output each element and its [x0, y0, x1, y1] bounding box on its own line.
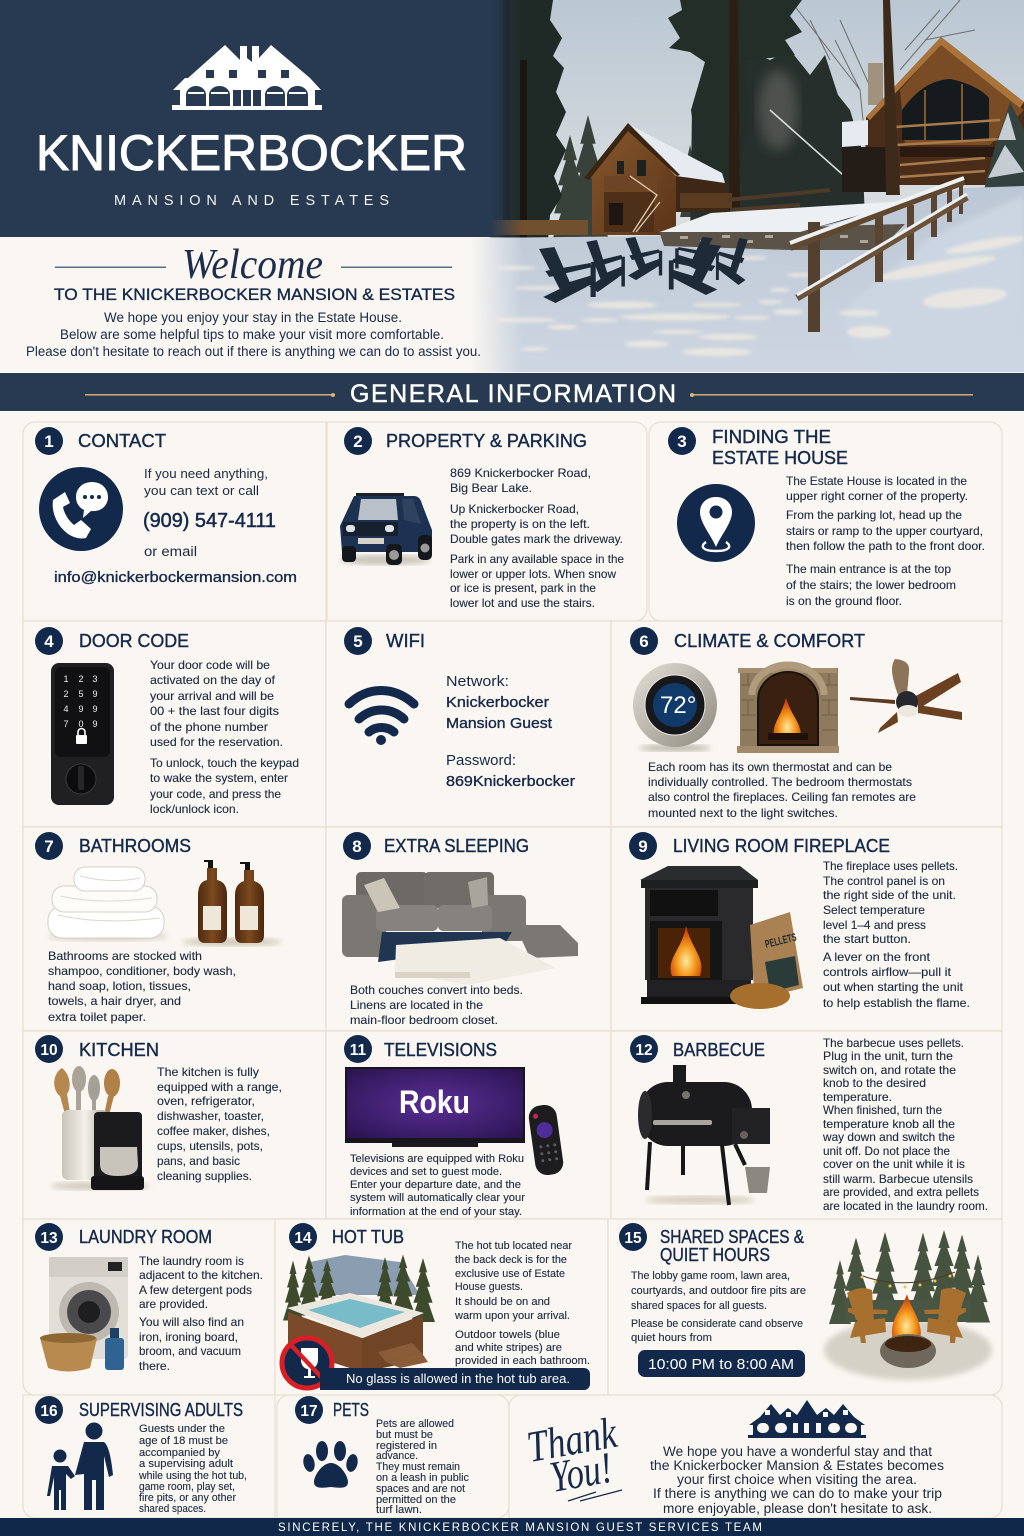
fireplace text: A lever on the front	[823, 950, 931, 964]
button: quiet hours	[638, 1350, 805, 1377]
heading: climate and comfort: CLIMATE & COMFORT	[674, 630, 865, 651]
thank you text: If there is anything we can do to make your trip	[653, 1486, 942, 1501]
number 4: 4	[44, 632, 54, 651]
supervising text: shared spaces.	[139, 1503, 206, 1515]
icon: thermostat: 72°	[660, 692, 696, 719]
panel: shared spaces and quiet hours	[608, 1219, 1002, 1395]
number 8	[343, 832, 371, 860]
door code text: 00 + the last four digits	[150, 704, 279, 718]
icon: television showing Roku: Roku	[399, 1084, 470, 1120]
barbecue text: temperature knob all the	[823, 1117, 955, 1131]
hot tub text: The hot tub located near	[455, 1240, 572, 1252]
number 7: 7	[44, 837, 54, 856]
wifi text	[446, 673, 575, 790]
heading: finding the estate house	[712, 426, 848, 468]
bathrooms text: Bathrooms are stocked with	[48, 949, 202, 963]
hot tub text: House guests.	[455, 1281, 523, 1293]
supervising text: Guests under the	[139, 1423, 225, 1435]
pets text: turf lawn.	[376, 1504, 422, 1516]
shared spaces text	[631, 1270, 806, 1344]
welcome panel background	[0, 237, 472, 373]
heading: property and parking: PROPERTY & PARKING	[386, 430, 587, 451]
number 9: 9	[638, 837, 648, 856]
icon: sofa bed	[342, 872, 578, 985]
hot tub text: provided in each bathroom.	[455, 1355, 590, 1367]
thank you script: Thank	[523, 1408, 622, 1472]
bathrooms text: towels, a hair dryer, and	[48, 994, 181, 1008]
property text: Park in any available space in the	[450, 552, 624, 566]
televisions text: Televisions are equipped with Roku	[350, 1153, 524, 1165]
barbecue text: When finished, turn the	[823, 1103, 942, 1117]
subtitle: MANSION AND ESTATES	[114, 193, 389, 209]
icon: smart lock: 3	[92, 674, 98, 684]
number 13: 13	[40, 1230, 58, 1247]
heading: shared spaces and quiet hours: SHARED SPACES &	[660, 1226, 805, 1247]
icon: television showing Roku	[345, 1067, 525, 1147]
header fade into photo	[490, 0, 522, 237]
footer band	[0, 1518, 1024, 1536]
kitchen text: cleaning supplies.	[157, 1169, 252, 1183]
kitchen text: dishwasher, toaster,	[157, 1109, 264, 1123]
Adirondack chairs	[539, 237, 748, 303]
number 1	[35, 427, 63, 455]
icon: location pin	[677, 484, 755, 562]
hot tub text	[454, 1240, 590, 1367]
number 14: 14	[294, 1230, 312, 1247]
televisions text: system will automatically clear your	[350, 1192, 525, 1204]
icon: remote control	[527, 1103, 565, 1177]
bathrooms text: hand soap, lotion, tissues,	[48, 979, 191, 993]
icon: smart lock: 9	[92, 689, 98, 699]
extra sleeping text: main-floor bedroom closet.	[350, 1013, 498, 1027]
icon: laundry basket and detergent	[40, 1328, 124, 1372]
tall pine, centre	[668, 0, 802, 213]
bathrooms text: extra toilet paper.	[48, 1010, 146, 1024]
icon: fire pit with chairs and pines	[824, 1230, 992, 1380]
banner: no glass	[320, 1368, 590, 1390]
heading: laundry room: LAUNDRY ROOM	[79, 1226, 212, 1247]
kitchen text: oven, refrigerator,	[157, 1094, 255, 1108]
icon: hot tub among pines	[283, 1254, 435, 1372]
heading: wifi: WIFI	[386, 630, 425, 651]
contact text: If you need anything,	[144, 466, 268, 481]
number 15	[619, 1223, 647, 1251]
heading: supervising adults: SUPERVISING ADULTS	[79, 1399, 243, 1420]
icon: wifi signal	[349, 690, 414, 744]
property text: lower lot and use the stairs.	[450, 596, 595, 610]
extra sleeping text	[350, 983, 523, 1027]
heading: pets: PETS	[333, 1399, 369, 1420]
panel: supervising adults	[23, 1395, 275, 1518]
barbecue text: Plug in the unit, turn the	[823, 1049, 953, 1063]
fireplace text: to help establish the flame.	[823, 996, 970, 1010]
icon: smart lock: 2	[63, 689, 69, 699]
icon: washing machine	[49, 1257, 128, 1359]
panel: living room fireplace	[611, 827, 1002, 1031]
section band: general information: GENERAL INFORMATION	[350, 380, 676, 408]
kitchen text: cups, utensils, pots,	[157, 1139, 263, 1153]
kitchen text: The kitchen is fully	[157, 1065, 259, 1079]
laundry text: broom, and vacuum	[139, 1344, 241, 1358]
climate text: mounted next to the light switches.	[648, 806, 838, 820]
panel: wifi	[326, 621, 611, 827]
fireplace text	[823, 859, 970, 1010]
climate text	[648, 760, 916, 820]
contact text: you can text or call	[144, 483, 259, 498]
hot tub text: and white stripes) are	[455, 1342, 562, 1354]
number 16: 16	[40, 1403, 58, 1420]
bathrooms text	[48, 949, 236, 1024]
number 10	[35, 1035, 63, 1063]
icon: amber bottles	[182, 860, 282, 946]
photo: snowy cabins and fire pit seating	[470, 0, 1024, 372]
icon: smart lock: 9	[78, 704, 84, 714]
heading: shared spaces and quiet hours: QUIET HOURS	[660, 1244, 770, 1265]
welcome rule left	[55, 266, 166, 268]
televisions text: Enter your departure date, and the	[350, 1179, 521, 1191]
number 15: 15	[624, 1230, 642, 1247]
welcome script: Welcome	[182, 242, 323, 288]
heading: hot tub: HOT TUB	[332, 1226, 404, 1247]
fireplace text: controls airflow—pull it	[823, 965, 952, 979]
kitchen text: pans, and basic	[157, 1154, 240, 1168]
door code text: your arrival and will be	[150, 689, 274, 703]
barbecue text	[822, 1036, 988, 1213]
fireplace text: the right side of the unit.	[823, 888, 956, 902]
pets text: but must be	[376, 1429, 433, 1441]
icon: smart lock: 2	[78, 674, 84, 684]
hot tub text: exclusive use of Estate	[455, 1268, 565, 1280]
property text: Double gates mark the driveway.	[450, 532, 623, 546]
background frosted trees	[690, 0, 975, 240]
climate text: also control the fireplaces. Ceiling fan remotes are	[648, 790, 916, 804]
button: quiet hours: 10:00 PM to 8:00 AM	[648, 1356, 794, 1373]
supervising text: fire pits, or any other	[139, 1492, 236, 1504]
icon: smart lock: 9	[92, 719, 98, 729]
property text	[450, 466, 624, 610]
barbecue text: cover on the unit while it is	[823, 1157, 965, 1171]
heading: barbecue: BARBECUE	[673, 1039, 765, 1060]
left log cabin	[484, 123, 830, 235]
panel: climate and comfort	[611, 621, 1002, 827]
pets text: registered in	[376, 1440, 437, 1452]
welcome rule right	[341, 266, 452, 268]
panel: hot tub	[275, 1219, 608, 1395]
property text: Big Bear Lake.	[450, 481, 532, 495]
door code text	[150, 658, 299, 816]
supervising text: while using the hot tub,	[138, 1470, 247, 1482]
heading: bathrooms: BATHROOMS	[79, 835, 191, 856]
extra sleeping text: Linens are located in the	[350, 998, 483, 1012]
pets text: spaces and are not	[376, 1483, 465, 1495]
footer band: SINCERELY, THE KNICKERBOCKER MANSION GUEST SERVICES TEAM	[278, 1522, 762, 1534]
barbecue text: still warm. Barbecue utensils	[823, 1172, 973, 1186]
contact text: info@knickerbockermansion.com	[54, 569, 297, 586]
number 13	[35, 1223, 63, 1251]
panel: kitchen	[23, 1031, 326, 1219]
finding text	[786, 474, 985, 608]
number 11: 11	[350, 1042, 367, 1059]
panel: extra sleeping	[326, 827, 611, 1031]
header navy panel	[0, 0, 490, 237]
televisions text	[350, 1153, 525, 1218]
icon: blue SUV	[340, 493, 432, 565]
climate text: individually controlled. The bedroom thermostats	[648, 775, 912, 789]
thank you text: the Knickerbocker Mansion & Estates becomes	[650, 1458, 944, 1473]
door code text: Your door code will be	[150, 658, 270, 672]
shared spaces text: Please be considerate cand observe	[631, 1318, 803, 1330]
panel: thank you	[509, 1395, 1002, 1518]
icon: smart lock: 9	[92, 704, 98, 714]
supervising text: game room, play set,	[139, 1481, 235, 1493]
title: KNICKERBOCKER	[36, 125, 467, 181]
panel: finding the estate house	[649, 422, 1002, 621]
shared spaces text: courtyards, and outdoor fire pits are	[631, 1285, 806, 1297]
icon: pellet bag and pile: PELLETS	[764, 932, 798, 951]
wifi text: Mansion Guest	[446, 715, 553, 732]
finding text: then follow the path to the front door.	[786, 539, 985, 553]
number 17	[295, 1396, 323, 1424]
number 3: 3	[677, 432, 687, 451]
pets text: They must remain	[376, 1461, 460, 1473]
panel: contact	[23, 422, 326, 621]
number 2	[344, 427, 372, 455]
laundry text: The laundry room is	[139, 1254, 244, 1268]
thank you script: You!	[546, 1443, 616, 1502]
number 12: 12	[635, 1042, 653, 1059]
heading: living room fireplace: LIVING ROOM FIREPLACE	[673, 835, 890, 856]
number 12	[630, 1035, 658, 1063]
barbecue text: switch on, and rotate the	[823, 1063, 956, 1077]
tall pine, left edge of photo	[485, 0, 566, 240]
welcome heading: TO THE KNICKERBOCKER MANSION & ESTATES	[54, 286, 455, 304]
wifi text: Password:	[446, 752, 516, 769]
shared spaces text: The lobby game room, lawn area,	[631, 1270, 790, 1282]
pets text: on a leash in public	[376, 1472, 469, 1484]
hot tub text: It should be on and	[455, 1296, 550, 1308]
wooden fence	[790, 178, 967, 332]
icon: smart lock: 4	[63, 704, 69, 714]
thank you text: your first choice when visiting the area.	[677, 1472, 917, 1487]
property text: Up Knickerbocker Road,	[450, 502, 579, 516]
door code text: your code, and press the	[150, 787, 281, 801]
property text: or ice is present, park in the	[450, 581, 596, 595]
panel: barbecue	[611, 1031, 1002, 1219]
heading: extra sleeping: EXTRA SLEEPING	[384, 835, 529, 856]
supervising text: accompanied by	[139, 1447, 221, 1459]
barbecue text: are located in the laundry room.	[823, 1199, 988, 1213]
number 1: 1	[44, 432, 54, 451]
barbecue text: way down and switch the	[822, 1130, 955, 1144]
pets text: Pets are allowed	[376, 1418, 454, 1430]
panel: pets	[277, 1395, 509, 1518]
number 4	[35, 627, 63, 655]
icon: pellet bag and pile	[730, 912, 803, 1009]
shared spaces text: quiet hours from	[631, 1332, 712, 1344]
number 3	[668, 427, 696, 455]
contact text: (909) 547-4111	[143, 510, 276, 532]
welcome text: Below are some helpful tips to make your visit more comfortable.	[60, 327, 444, 342]
number 14	[289, 1223, 317, 1251]
extra sleeping text: Both couches convert into beds.	[350, 983, 523, 997]
barbecue text: knob to the desired	[823, 1076, 926, 1090]
icon: stone fireplace	[737, 665, 839, 753]
icon: pellet stove	[640, 866, 758, 1004]
pets text: permitted on the	[376, 1494, 456, 1506]
icon: paw print	[302, 1441, 359, 1488]
thank you text: more enjoyable, please don't hesitate to ask.	[663, 1501, 932, 1516]
icon: smart lock: 5	[78, 689, 84, 699]
panel: televisions	[326, 1031, 611, 1219]
number 17: 17	[300, 1403, 318, 1420]
icon: thermostat	[633, 663, 717, 751]
property text: the property is on the left.	[450, 517, 590, 531]
kitchen text	[157, 1065, 282, 1183]
stone wall and snowy terrace	[659, 200, 922, 250]
fireplace text: The control panel is on	[823, 874, 945, 888]
barbecue text: temperature.	[823, 1090, 892, 1104]
laundry text: iron, ironing board,	[139, 1330, 238, 1344]
icon: pellet smoker	[638, 1065, 770, 1205]
shared spaces text: shared spaces for all guests.	[631, 1300, 767, 1312]
laundry text: are provided.	[139, 1297, 208, 1311]
panel: property and parking	[327, 422, 647, 621]
thank you text	[650, 1444, 944, 1516]
door code text: of the phone number	[150, 720, 268, 734]
number 8: 8	[352, 837, 362, 856]
hot tub text: Outdoor towels (blue	[455, 1329, 560, 1341]
hot tub text: warm upon your arrival.	[454, 1310, 570, 1322]
number 5: 5	[353, 632, 363, 651]
kitchen text: equipped with a range,	[157, 1080, 282, 1094]
heading: shared spaces and quiet hours	[660, 1226, 805, 1265]
logo: mansion small	[748, 1400, 866, 1438]
supervising text: age of 18 must be	[139, 1435, 228, 1447]
laundry text: A few detergent pods	[139, 1283, 252, 1297]
icon: stacked towels	[48, 867, 168, 941]
heading: door code: DOOR CODE	[79, 630, 189, 651]
finding text: of the stairs; the lower bedroom	[786, 578, 956, 592]
icon: no glass sign	[282, 1338, 332, 1388]
wifi text: Network:	[446, 673, 509, 690]
door code text: used for the reservation.	[150, 735, 283, 749]
heading: finding the estate house: ESTATE HOUSE	[712, 447, 848, 468]
icon: adult and child	[47, 1422, 113, 1510]
number 10: 10	[40, 1042, 58, 1059]
icon: smart lock: 7	[63, 719, 69, 729]
section band: general information	[0, 373, 1024, 411]
property text: 869 Knickerbocker Road,	[450, 466, 591, 480]
fireplace text: The fireplace uses pellets.	[823, 859, 958, 873]
property text: lower or upper lots. When snow	[450, 567, 616, 581]
finding text: stairs or ramp to the upper courtyard,	[786, 524, 983, 538]
finding text: is on the ground floor.	[786, 594, 902, 608]
barbecue text: The barbecue uses pellets.	[823, 1036, 964, 1050]
supervising text: a supervising adult	[139, 1458, 233, 1470]
panel: door code	[23, 621, 326, 827]
door code text: lock/unlock icon.	[150, 802, 239, 816]
right timber lodge	[842, 37, 1024, 192]
number 6: 6	[639, 632, 649, 651]
wifi text: Knickerbocker	[446, 694, 549, 711]
door code text: to wake the system, enter	[150, 771, 288, 785]
contact text: or email	[144, 544, 197, 559]
logo: mansion	[172, 45, 322, 110]
panel: laundry room	[23, 1219, 275, 1395]
icon: ceiling fan	[850, 659, 962, 733]
televisions text: devices and set to guest mode.	[350, 1166, 502, 1178]
finding text: upper right corner of the property.	[786, 489, 968, 503]
laundry text: You will also find an	[139, 1315, 244, 1329]
laundry text	[139, 1254, 263, 1373]
door code text: To unlock, touch the keypad	[150, 756, 299, 770]
snowy ground	[470, 186, 1024, 372]
heading: televisions: TELEVISIONS	[384, 1039, 497, 1060]
number 16	[35, 1396, 63, 1424]
heading: finding the estate house: FINDING THE	[712, 426, 831, 447]
climate text: Each room has its own thermostat and can be	[648, 760, 892, 774]
finding text: The Estate House is located in the	[786, 474, 967, 488]
pets text: advance.	[376, 1450, 418, 1462]
welcome fade into photo	[470, 237, 522, 373]
snow tree, far right	[984, 102, 1024, 190]
number 9	[629, 832, 657, 860]
wifi text: 869Knickerbocker	[446, 773, 575, 790]
hot tub text: the back deck is for the	[455, 1254, 567, 1266]
televisions text: information at the end of your stay.	[350, 1206, 522, 1218]
number 5	[344, 627, 372, 655]
fireplace text: the start button.	[823, 932, 911, 946]
thank you text: We hope you have a wonderful stay and that	[663, 1444, 932, 1459]
icon: smart lock: 1	[63, 674, 69, 684]
bathrooms text: shampoo, conditioner, body wash,	[48, 964, 236, 978]
door code text: activated on the day of	[150, 673, 276, 687]
icon: utensils in crock and coffee maker	[50, 1066, 150, 1190]
laundry text: adjacent to the kitchen.	[139, 1268, 263, 1282]
fireplace text: Select temperature	[823, 903, 925, 917]
number 2: 2	[353, 432, 363, 451]
icon: smart lock	[51, 663, 114, 805]
number 6	[630, 627, 658, 655]
laundry text: there.	[139, 1359, 170, 1373]
heading: contact: CONTACT	[78, 430, 166, 451]
number 11	[344, 1035, 372, 1063]
welcome text: Please don't hesitate to reach out if there is anything we can do to assist you.	[26, 344, 481, 359]
thank you script	[523, 1408, 622, 1502]
finding text: The main entrance is at the top	[786, 562, 951, 576]
icon: smart lock: 0	[78, 719, 84, 729]
icon: phone with speech bubble	[39, 467, 123, 551]
panel: bathrooms	[23, 827, 326, 1031]
number 7	[35, 832, 63, 860]
supervising text	[138, 1423, 247, 1515]
contact text	[54, 466, 297, 586]
welcome text: We hope you enjoy your stay in the Estate House.	[104, 310, 402, 325]
fireplace text: level 1–4 and press	[823, 918, 926, 932]
finding text: From the parking lot, head up the	[786, 508, 962, 522]
banner: no glass: No glass is allowed in the hot tub area.	[346, 1372, 570, 1386]
fireplace text: out when starting the unit	[823, 980, 964, 994]
barbecue text: unit off. Do not place the	[823, 1144, 950, 1158]
pets text	[376, 1418, 469, 1516]
welcome text	[26, 310, 481, 359]
kitchen text: coffee maker, dishes,	[157, 1124, 270, 1138]
barbecue text: are provided, and extra pellets	[823, 1185, 979, 1199]
heading: kitchen: KITCHEN	[79, 1039, 159, 1060]
